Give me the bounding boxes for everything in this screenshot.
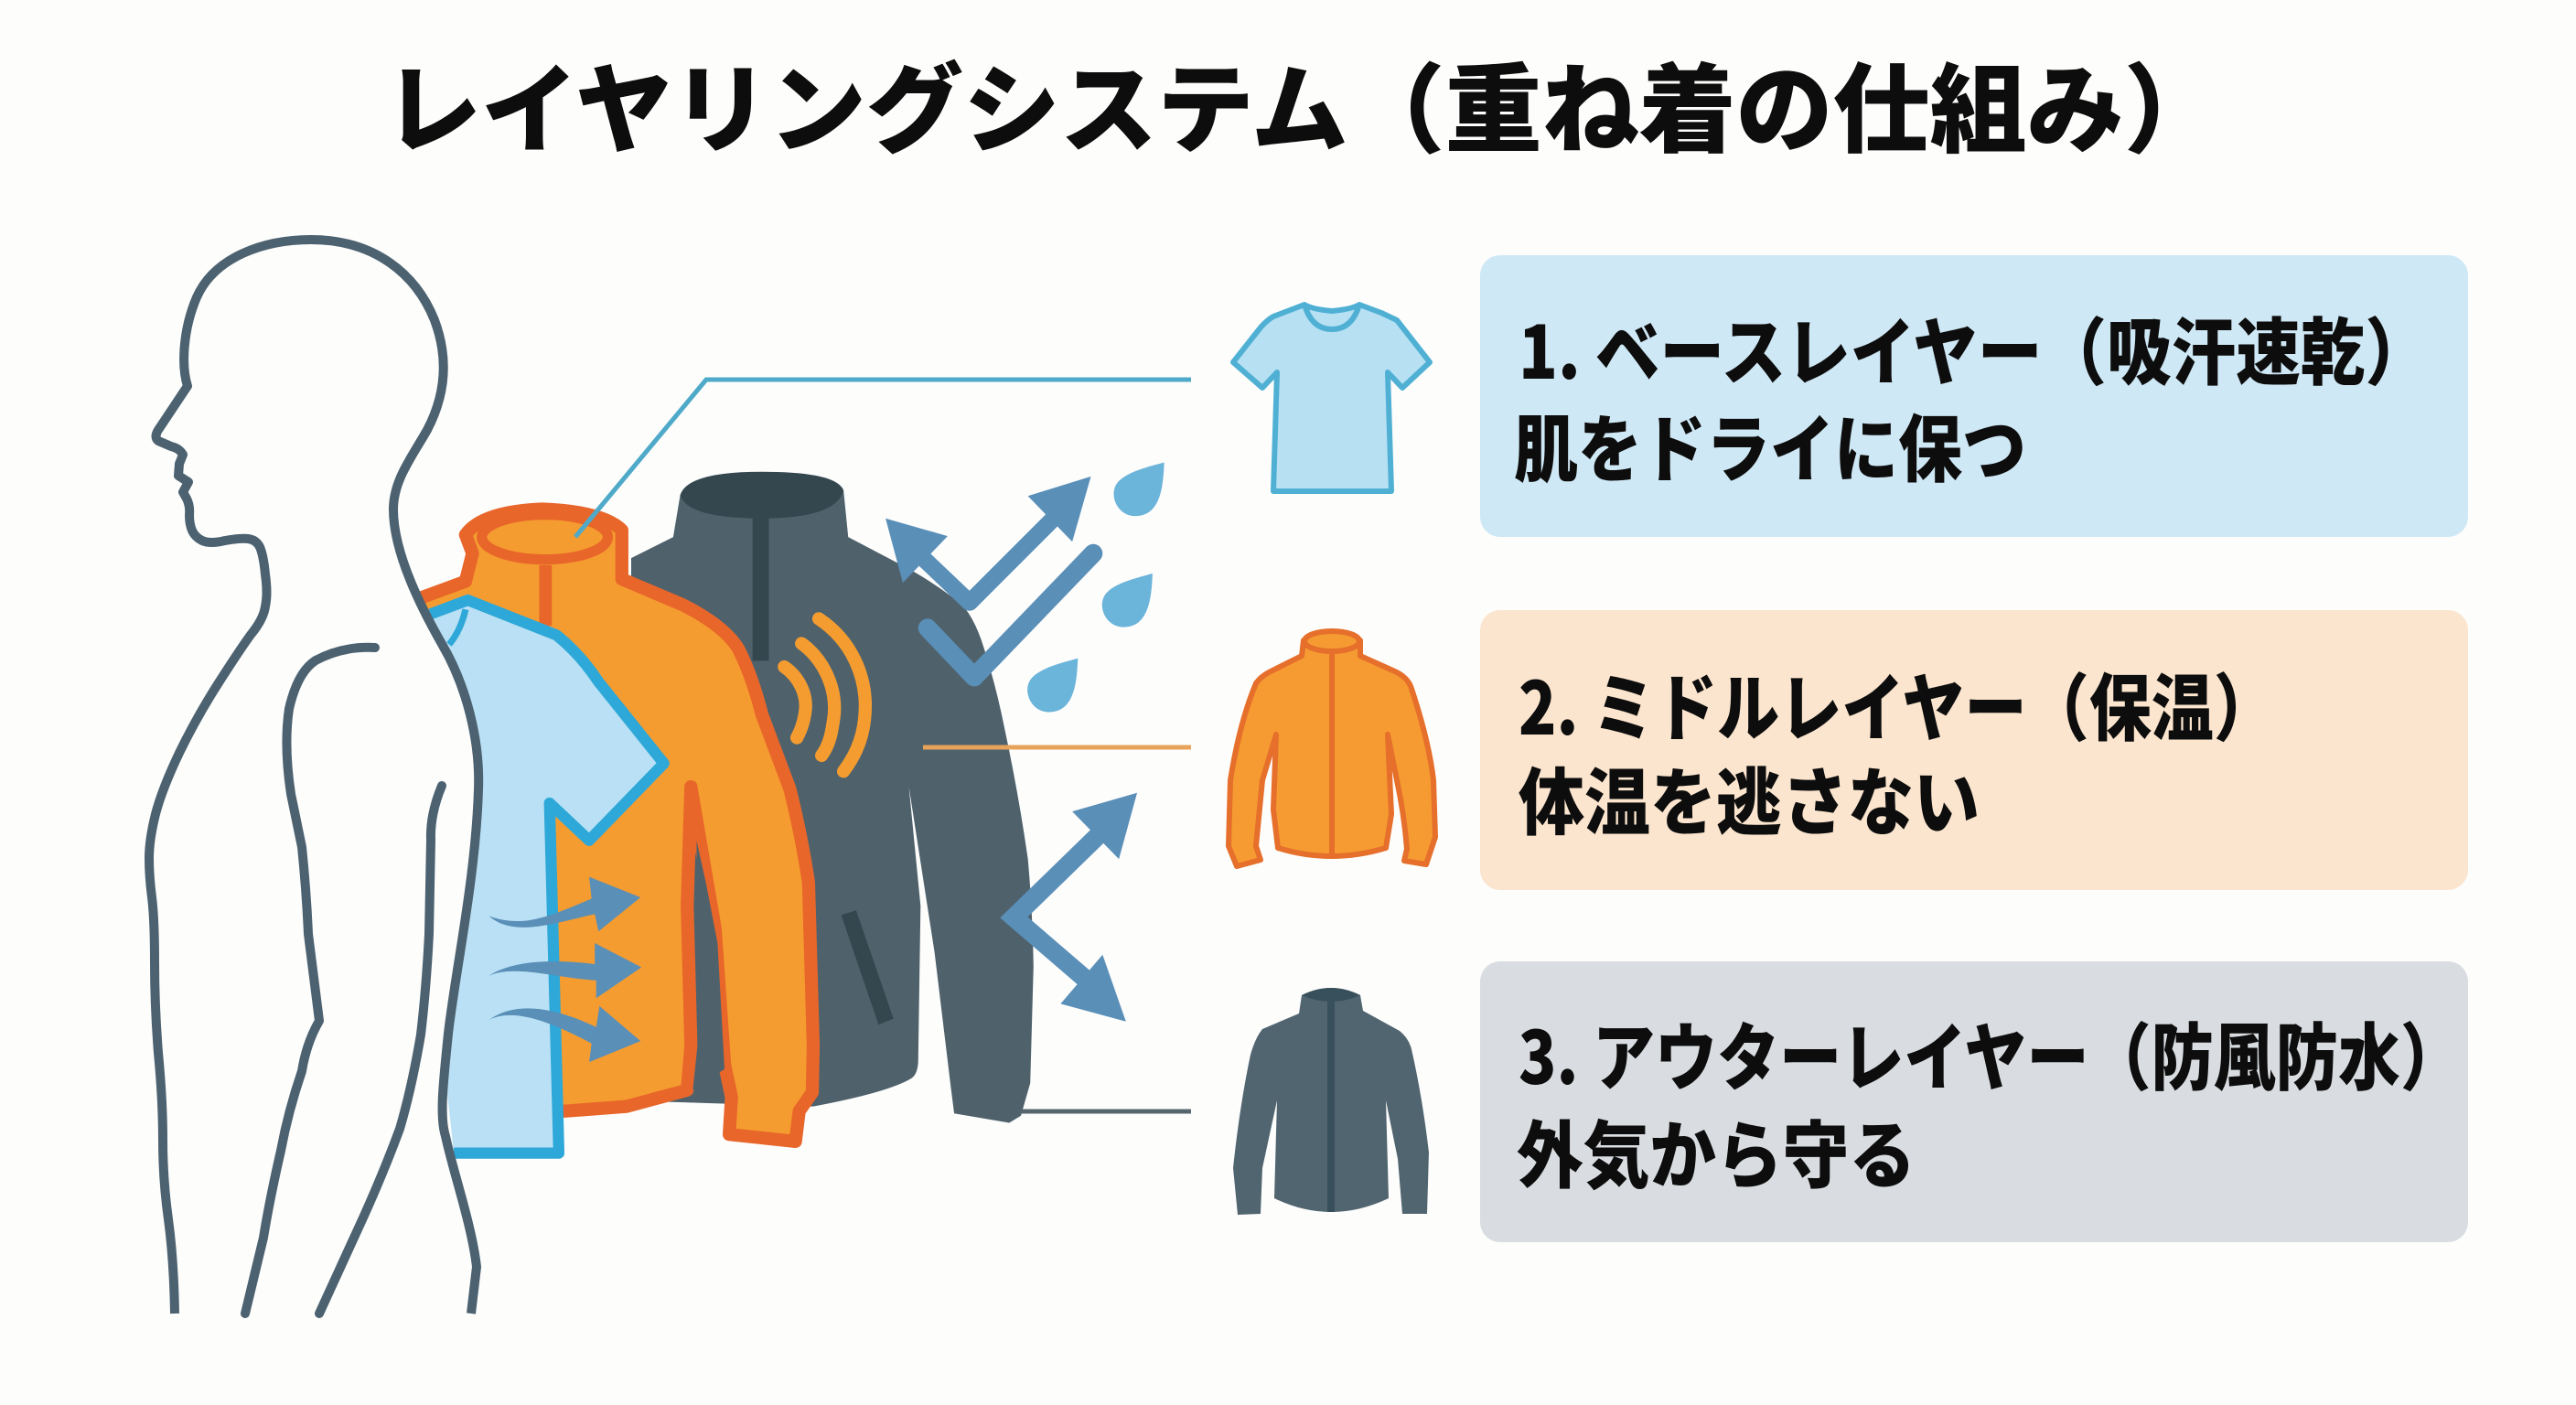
- heading: base layer: 1. ベースレイヤー（吸汗速乾）: [1519, 295, 2430, 401]
- leader line: base layer: [575, 380, 1191, 537]
- outer layer jacket: [631, 472, 1034, 1122]
- middle layer jacket: [421, 509, 813, 1142]
- description: outer layer: 外気から守る: [1517, 1098, 1916, 1204]
- illustration: layered garments: [421, 463, 1165, 1153]
- panel: outer layer: [1480, 961, 2468, 1242]
- icon: water drops: [1027, 463, 1165, 712]
- panel: base layer: [1480, 255, 2468, 537]
- leader line: middle layer: [923, 745, 1191, 750]
- icon: heat waves: [784, 618, 865, 771]
- heading: middle layer: 2. ミドルレイヤー（保温）: [1519, 650, 2276, 756]
- panel: middle layer: [1480, 610, 2468, 890]
- description: base layer: 肌をドライに保つ: [1514, 391, 2026, 498]
- description: middle layer: 体温を逃さない: [1519, 745, 1980, 851]
- icon: fleece jacket: [1229, 631, 1435, 866]
- human body outline: [149, 240, 478, 1314]
- arrows: moisture moving outward through base layer: [488, 877, 641, 1062]
- base layer tee: [431, 600, 664, 1153]
- icon: shell jacket: [1233, 988, 1429, 1215]
- title: レイヤリングシステム（重ね着の仕組み）: [384, 32, 2221, 173]
- arrows: vapor escaping and rain shed: [886, 477, 1093, 677]
- leader line: outer layer: [1021, 1109, 1191, 1114]
- arrows: wind deflected: [1014, 793, 1137, 1022]
- icon: t-shirt: [1233, 305, 1430, 491]
